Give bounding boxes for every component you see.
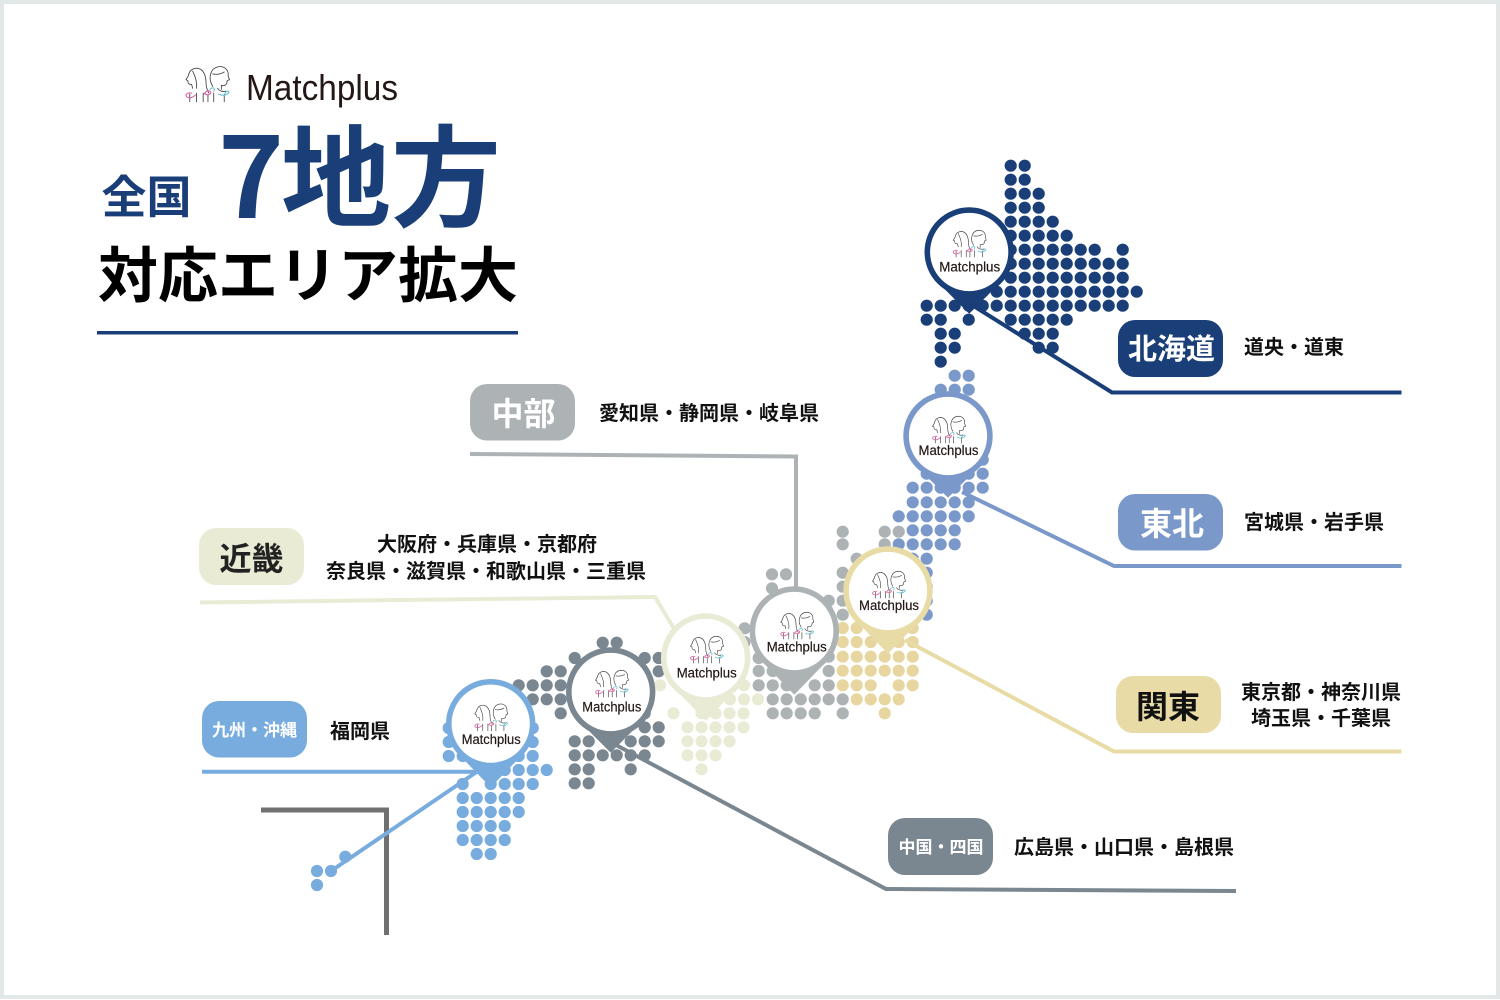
map pin: Chubu	[752, 589, 836, 694]
region label: Kinki	[199, 528, 646, 585]
leader line: Chugoku and Shikoku	[616, 745, 1236, 891]
region label: Chugoku and Shikoku	[888, 818, 1234, 875]
logo: Matchplus: Matchplus	[246, 67, 398, 108]
title: 対応エリア拡大	[98, 228, 518, 315]
region label: Hokkaido: 道央・道東	[1244, 331, 1344, 360]
leader line: Tohoku	[962, 492, 1402, 566]
region label: Kyushu and Okinawa: 福岡県	[330, 715, 390, 744]
region label: Hokkaido: 北海道	[1128, 326, 1215, 368]
leader line: Kinki	[200, 597, 676, 632]
region label: Chubu: 中部	[491, 389, 556, 435]
region label: Tohoku: 東北	[1140, 499, 1204, 545]
map pin: Kinki	[664, 616, 748, 720]
map pin: Kanto	[846, 549, 930, 653]
region label: Kinki: 大阪府・兵庫県・京都府	[377, 528, 597, 557]
dot map: Kanto	[843, 628, 913, 713]
region label: Chubu: 愛知県・静岡県・岐阜県	[599, 397, 819, 426]
region label: Hokkaido	[1118, 320, 1344, 377]
map pin: Kyushu: Matchplus	[462, 732, 521, 747]
region label: Chubu	[470, 384, 819, 440]
region label: Kanto: 埼玉県・千葉県	[1251, 702, 1391, 731]
dot map: Hokkaido	[927, 166, 1137, 362]
region label: Tohoku: 宮城県・岩手県	[1244, 506, 1384, 535]
leader line: Chubu	[470, 454, 796, 592]
region label: Kanto	[1116, 676, 1401, 733]
region label: Kinki: 奈良県・滋賀県・和歌山県・三重県	[326, 555, 646, 584]
map pin: Hokkaido: Matchplus	[939, 260, 1000, 275]
map pin: Tohoku	[906, 394, 990, 497]
map pin: Kanto: Matchplus	[859, 598, 919, 613]
leader line: Okinawa	[331, 771, 478, 871]
dot map: Tohoku	[899, 376, 983, 615]
region label: Chugoku and Shikoku: 広島県・山口県・島根県	[1014, 831, 1234, 860]
leader line: Kanto	[905, 640, 1402, 752]
dot map: Kinki	[660, 685, 758, 769]
title: 全国	[102, 161, 192, 226]
map pin: Chubu: Matchplus	[767, 640, 827, 655]
dot map: Chugoku and Shikoku	[519, 643, 659, 783]
map pin: Kinki: Matchplus	[677, 665, 737, 680]
map pin: Chugoku and Shikoku: Matchplus	[582, 700, 642, 715]
region label: Kinki: 近畿	[219, 534, 284, 580]
map pin: Chugoku and Shikoku	[569, 650, 653, 752]
region label: Kanto: 関東	[1136, 682, 1200, 728]
okinawa inset frame	[261, 810, 386, 935]
logo: Matchplus	[186, 67, 398, 108]
dot map: Chubu	[745, 532, 899, 713]
region label: Tohoku	[1118, 494, 1384, 550]
title	[98, 89, 518, 315]
leader line: Kyushu	[202, 770, 480, 774]
region label: Kanto: 東京都・神奈川県	[1241, 676, 1401, 705]
title: 7	[218, 89, 284, 251]
map pin: Kyushu	[449, 682, 533, 787]
map pin: Hokkaido	[927, 210, 1011, 313]
region label: Kyushu and Okinawa: 九州・沖縄	[212, 716, 297, 741]
region label: Chugoku and Shikoku: 中国・四国	[898, 833, 984, 858]
leader line: Hokkaido	[972, 305, 1402, 392]
title: 地方	[281, 90, 501, 250]
region label: Kyushu and Okinawa	[202, 701, 390, 758]
title underline	[97, 331, 518, 334]
map pin: Tohoku: Matchplus	[918, 443, 979, 458]
dot map: Kyushu and Okinawa	[317, 728, 547, 885]
